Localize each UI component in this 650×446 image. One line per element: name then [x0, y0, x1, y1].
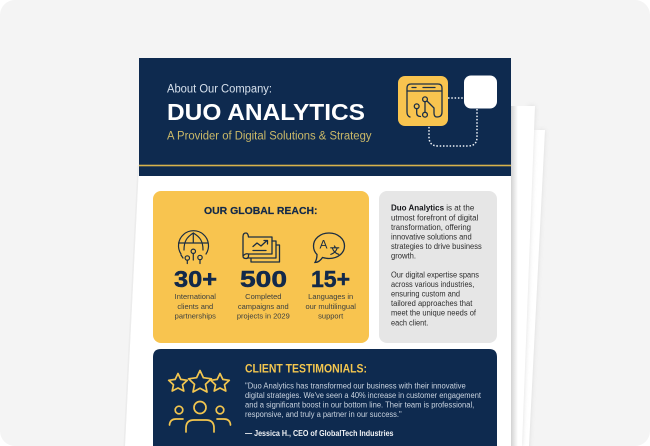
dotted connector [429, 98, 477, 146]
label: clients: partnerships [175, 312, 216, 320]
icon: translation bubble: A [320, 238, 328, 252]
panel: global reach [153, 191, 369, 343]
paragraph one: strategies to drive business [391, 242, 482, 251]
paragraph one: transformation, offering [391, 223, 471, 232]
quote [245, 381, 482, 419]
label: languages: our multilingual [305, 302, 356, 311]
header banner [139, 58, 511, 176]
label: clients: International [175, 292, 216, 301]
paragraph one: growth. [391, 251, 416, 260]
icon: report scroll [243, 233, 280, 262]
paragraph two: ensuring custom and [391, 290, 460, 298]
paragraph two: tailored approaches that [391, 299, 473, 308]
icon: translation bubble [314, 233, 344, 262]
document page [139, 58, 511, 446]
icon: code window [398, 76, 448, 126]
icon: stars and people [169, 370, 230, 432]
panel: about text [379, 191, 497, 343]
quote: "Duo Analytics has transformed our business with their innovative [245, 381, 466, 390]
icon: translation bubble: 文 [329, 245, 340, 257]
paragraph two [391, 270, 479, 327]
paragraph one: innovative solutions and [391, 232, 472, 241]
paragraph two: meet the unique needs of [391, 309, 477, 318]
label: clients: clients and [177, 302, 213, 311]
label: campaigns: Completed [245, 292, 281, 301]
paragraph one: Duo Analytics is at the [391, 204, 475, 213]
stat: 500: 500 [240, 266, 287, 292]
quote: responsive, and truly a partner in our success." [245, 410, 402, 419]
title: DUO ANALYTICS [167, 99, 365, 125]
quote: and a significant boost in our bottom line. Their team is professional, [245, 400, 474, 410]
heading: OUR GLOBAL REACH: [204, 205, 318, 217]
label: languages: support [318, 312, 344, 320]
paragraph one [391, 204, 482, 260]
stat: 15+: 15+ [311, 266, 350, 292]
quote: digital strategies. We've seen a 40% increase in customer engagement [245, 391, 482, 400]
label: campaigns: projects in 2029 [237, 312, 290, 320]
panel: client testimonials [153, 349, 497, 446]
icon: globe [178, 231, 208, 264]
white node [464, 76, 497, 108]
heading: CLIENT TESTIMONIALS: [245, 364, 367, 376]
paragraph two: across various industries, [391, 280, 474, 289]
subtitle: A Provider of Digital Solutions & Strategy [167, 130, 372, 142]
label: campaigns: campaigns and [238, 302, 289, 311]
attribution: — Jessica H., CEO of GlobalTech Industries [245, 429, 394, 438]
paragraph two: each client. [391, 318, 428, 327]
eyebrow text: About Our Company: [167, 84, 272, 96]
paragraph two: Our digital expertise spans [391, 270, 479, 279]
stat: 30+: 30+ [174, 266, 217, 292]
label: languages: Languages in [308, 292, 353, 301]
paragraph one: utmost forefront of digital [391, 213, 479, 222]
stacked paper sheets [124, 106, 545, 446]
